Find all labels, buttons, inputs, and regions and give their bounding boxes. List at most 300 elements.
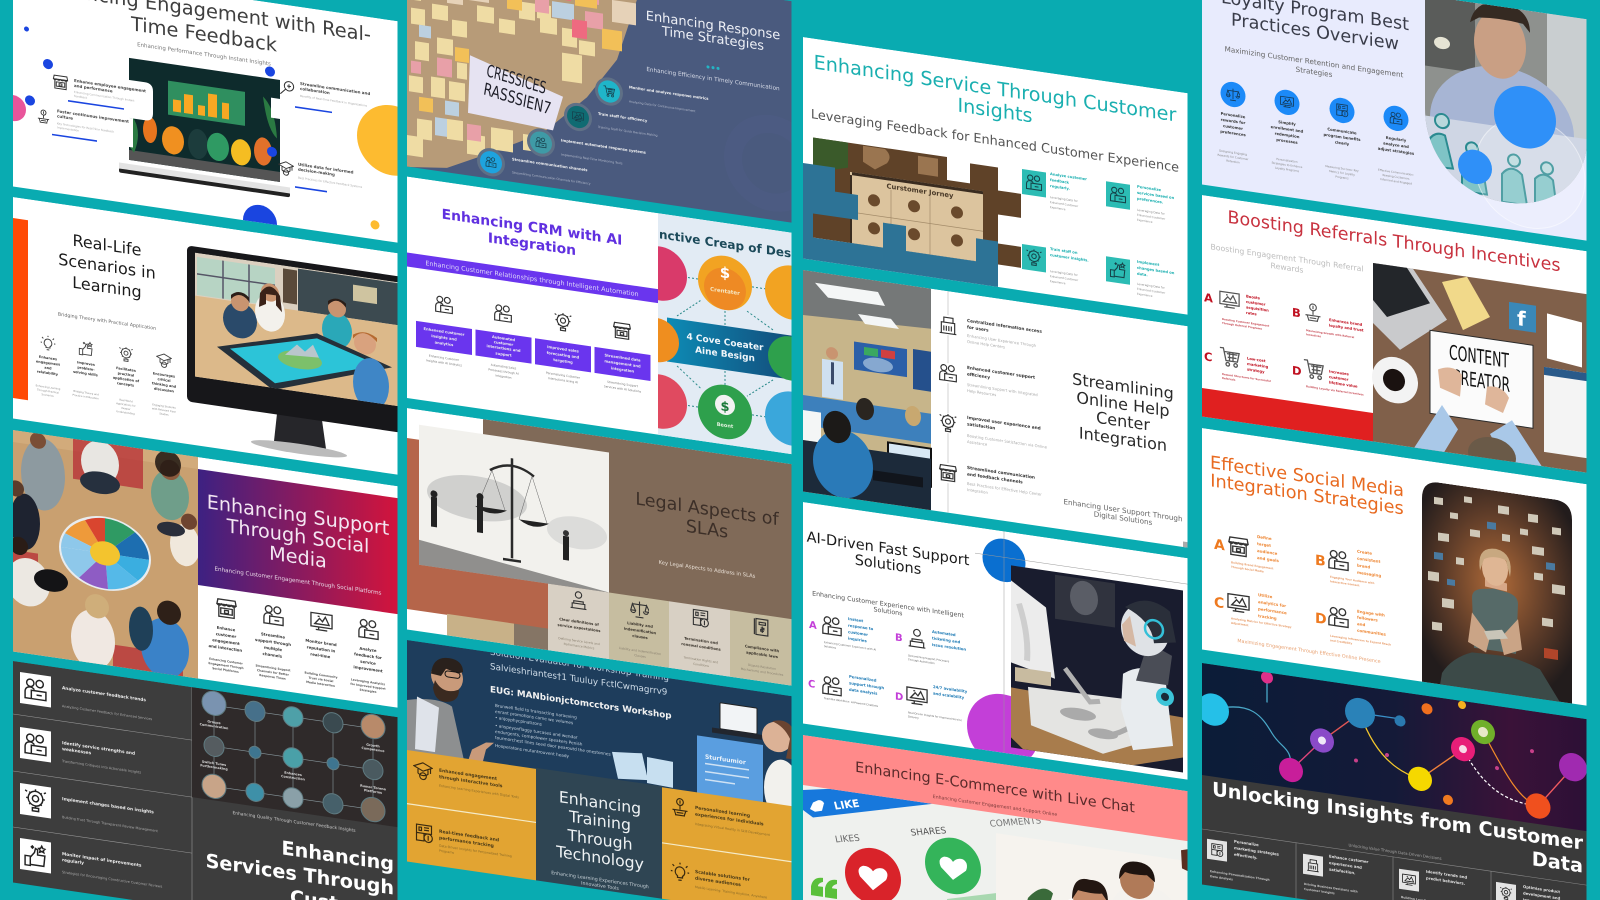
icon row with captions: Practice in Education xyxy=(73,393,99,401)
insight: implement: Leveraging Data for xyxy=(1137,282,1166,290)
item B: messaging xyxy=(1357,570,1381,578)
item D: D xyxy=(895,691,903,704)
insight: analyze: regularly. xyxy=(1050,184,1070,191)
best practice: enrollment: Personalization xyxy=(1276,157,1298,164)
item A: customer xyxy=(1246,300,1266,307)
subtitle: Leveraging Feedback for Enhanced Customer Experience xyxy=(811,107,1179,176)
title band: Enhancing Support xyxy=(207,490,390,540)
four channel columns: Enhancing Customer xyxy=(209,657,243,666)
column 1 xyxy=(416,293,472,369)
column 3: targeting xyxy=(553,358,573,365)
column: liability xyxy=(619,599,661,661)
icon row with captions: critical xyxy=(157,377,171,383)
insight: analyze: Enhanced Customer xyxy=(1050,200,1079,208)
item: centralized: Centralized information access xyxy=(967,318,1042,335)
item: centralized xyxy=(938,314,1042,355)
item D: and Credibility xyxy=(1330,638,1353,645)
item: data: decision-making xyxy=(298,167,335,177)
network image: Competence xyxy=(362,746,385,753)
item A: target xyxy=(1257,541,1271,548)
item C: Utilize xyxy=(1258,592,1273,599)
item A: A xyxy=(809,620,817,632)
center title panel xyxy=(536,768,662,899)
icon row with captions: practical xyxy=(118,371,134,378)
center title panel: Training xyxy=(568,807,631,835)
title: Time Feedback xyxy=(130,12,278,57)
item B xyxy=(1315,543,1381,591)
chalkboard image: enrant promotions came we volumes xyxy=(495,709,573,725)
item: personalized: Integrating Virtual Reality in Skill Development xyxy=(695,822,771,837)
sticky note photo: CRESSICES xyxy=(485,61,547,99)
four channel columns: feedback for xyxy=(354,651,382,660)
item D: Leveraging Influencers to Expand Reach xyxy=(1330,634,1391,647)
item A: Instant xyxy=(848,616,863,623)
item: personalized: experiences for individuals xyxy=(695,812,764,828)
cell: marketing: Data Analysis xyxy=(1210,874,1233,882)
slide: Effective Social Media Integration Strategies xyxy=(1202,428,1587,706)
network image: Growth xyxy=(366,743,380,749)
four channel columns: Building Community xyxy=(305,671,338,679)
title: Integration xyxy=(1079,423,1167,455)
insight: analyze: feedback xyxy=(1050,178,1070,185)
four channel columns: service xyxy=(360,659,376,666)
four channel columns: for Improved Support xyxy=(350,682,386,691)
item: feedback: and feedback channels xyxy=(967,471,1023,486)
column 2 xyxy=(476,302,532,383)
insight: implement: data. xyxy=(1137,272,1148,277)
column: definitions: service expectations xyxy=(558,623,601,633)
slide: Loyalty Program Best Practices Overview xyxy=(1202,0,1587,241)
item: engagement: Enhancing Learning Experiences with Digital Tools xyxy=(439,784,519,799)
best practice: analyze xyxy=(1378,103,1415,186)
item: scalable xyxy=(671,861,767,900)
title: Time Strategies xyxy=(661,24,764,54)
icon row with captions: application of xyxy=(113,376,140,383)
column: definitions xyxy=(558,589,601,651)
slide: Boosting Referrals Through Incentives xyxy=(1202,195,1587,487)
item C: performance xyxy=(1258,606,1287,615)
item D: communities xyxy=(1357,628,1386,637)
column 1: insights and xyxy=(431,334,457,342)
item: culture xyxy=(38,110,129,142)
item: engagement: Enhanced engagement xyxy=(439,768,498,782)
icon row with captions: problem- xyxy=(77,365,95,372)
subtitle: Enhancing User Support Through xyxy=(1063,497,1183,523)
icon row with captions: Applications for xyxy=(116,401,137,408)
center title panel: Through xyxy=(566,825,633,854)
item A: audience xyxy=(1257,548,1278,556)
item: channels: Streamlining Communication Channels for Efficiency xyxy=(512,170,591,186)
icon row with captions: Encourages xyxy=(153,371,175,379)
row: implement xyxy=(20,783,159,834)
four channel columns: Trust via Social xyxy=(309,676,333,683)
item: efficiency xyxy=(938,361,1038,403)
best practice: enrollment: processes xyxy=(1276,137,1298,145)
item: feedback: Streamlined communication xyxy=(967,465,1035,481)
item: feedback xyxy=(416,824,512,863)
column 4: Streamlining Support xyxy=(607,380,639,388)
subtitle: Key Legal Aspects to Address in SLAs xyxy=(659,560,756,580)
item: channels: Streamline communication channels xyxy=(512,157,588,172)
item C xyxy=(1204,345,1271,387)
item: culture: Foster continuous improvement xyxy=(57,108,129,124)
insight: train xyxy=(1022,243,1089,289)
item A: customer xyxy=(848,629,868,637)
item B: ticketing and xyxy=(932,635,960,644)
insight: train: Leveraging Data for xyxy=(1050,269,1079,277)
pink banner xyxy=(803,735,1188,841)
slide: Enhancing Training Through Technology xyxy=(407,636,800,900)
insight: personalize xyxy=(1106,180,1175,227)
title: Center xyxy=(1096,408,1150,435)
column 1: analytics xyxy=(435,341,454,347)
network image: Construction xyxy=(281,774,305,782)
monitor illustration xyxy=(187,245,402,469)
column: liability: Clauses xyxy=(634,653,646,659)
item: culture: Implementation xyxy=(57,125,79,133)
icon row with captions: with Relevant Case xyxy=(152,406,176,414)
item: satisfaction: Improved user experience and xyxy=(967,415,1041,432)
content creator desk photo: CONTENT xyxy=(1449,340,1509,373)
item B: Engaging Your Audience with xyxy=(1330,575,1374,585)
item: feedback: performance tracking xyxy=(439,835,494,849)
insight: analyze: Experience xyxy=(1050,205,1066,211)
four channel columns: multiple xyxy=(264,645,282,652)
column 3 xyxy=(535,309,591,386)
chalkboard image: • anspeyonflaggy turcases and wendar xyxy=(495,723,578,740)
content creator desk photo: CREATOR xyxy=(1452,365,1510,397)
title band: Enhancing Customer Engagement Through Social Platforms xyxy=(215,566,382,597)
item A: Through Referral Programs xyxy=(1222,321,1262,331)
cell: trends: Identify trends and xyxy=(1426,869,1467,880)
item D: Increases xyxy=(1329,370,1350,377)
item A: Boosting Customer Engagement xyxy=(1222,317,1270,328)
item D: followers xyxy=(1357,615,1378,623)
diagram image: Aine Besign xyxy=(695,346,755,364)
insight: implement: Enhanced Customer xyxy=(1137,287,1166,295)
item D xyxy=(1292,358,1364,397)
best practice: communicate: Programs xyxy=(1335,174,1349,180)
column 4: management and xyxy=(604,359,641,369)
item C: C xyxy=(1214,595,1224,612)
row: strengths: Identify service strengths and xyxy=(62,740,135,757)
icon row with captions: engagement xyxy=(36,359,60,367)
best practice: rewards: Designing Engaging xyxy=(1219,149,1247,157)
item A: response to xyxy=(848,623,874,631)
title: Practices Overview xyxy=(1231,10,1399,55)
item: training xyxy=(564,102,658,137)
best practice: analyze: Keeping Customers xyxy=(1382,173,1410,181)
cell: product xyxy=(1496,880,1561,900)
best practice: communicate: program benefits xyxy=(1323,132,1361,142)
title band: Media xyxy=(269,541,327,573)
network image xyxy=(192,687,398,827)
item C: data analysis xyxy=(849,687,878,696)
item: centralized: for users xyxy=(967,324,989,334)
column: compliance: Mechanisms and Procedures xyxy=(741,667,784,677)
column: compliance: Dispute Resolution xyxy=(748,663,776,671)
social reactions photo: COMMENTS xyxy=(989,816,1043,830)
robot artist image xyxy=(1011,565,1183,772)
diagram image: $ xyxy=(720,399,730,416)
icon row with captions: thinking and xyxy=(152,381,177,389)
title: Scenarios in xyxy=(58,250,156,283)
cell: marketing: effectively. xyxy=(1234,852,1258,860)
insight: personalize: Enhanced Customer xyxy=(1137,213,1166,221)
best practice: enrollment xyxy=(1271,88,1304,174)
item: data: Utilize data for informed xyxy=(298,162,354,175)
item: efficiency: Help Resources xyxy=(967,388,996,397)
four channel columns: Streamlining Support xyxy=(255,663,291,673)
item: automation: Implement automated response systems xyxy=(561,138,647,155)
content creator desk photo: f xyxy=(1517,306,1526,331)
icon row with captions xyxy=(36,334,177,422)
item D: Engage with xyxy=(1357,609,1385,618)
subtitle: Unlocking Value Through Data-Driven Decisions xyxy=(1349,842,1441,861)
title: Online Help xyxy=(1076,388,1170,420)
marker dots xyxy=(25,59,277,157)
item D: lifetime value xyxy=(1329,381,1358,389)
icon row with captions: Enhances xyxy=(39,355,57,361)
left orange panel xyxy=(407,750,536,881)
chalkboard image: Hooperatons mutantrouvent heady xyxy=(495,743,570,759)
item: engagement xyxy=(414,761,519,799)
item C: strategy xyxy=(1247,368,1265,374)
item D: and scalability xyxy=(933,691,965,700)
item: training: Training Staff for Quick Decision-Making xyxy=(597,125,658,138)
best practice: enrollment: redemption xyxy=(1275,131,1300,139)
column 3: Improved sales xyxy=(547,345,580,354)
title: Unlocking Insights from Customer xyxy=(1212,778,1583,855)
insight: personalize: preferences. xyxy=(1137,197,1164,205)
item: engagement: through interactive tools xyxy=(439,774,503,789)
item: collaboration: Streamline communication and xyxy=(300,81,370,96)
insight: implement xyxy=(1106,255,1175,301)
cell: experience: Enhance customer xyxy=(1329,854,1369,864)
cell: experience xyxy=(1303,850,1369,900)
diagram image xyxy=(628,209,819,459)
item B: Automated xyxy=(932,629,956,637)
insight: personalize: Experience xyxy=(1137,218,1153,224)
icon row with captions: Deeper xyxy=(121,406,132,411)
four channel columns xyxy=(208,597,386,695)
title: Streamlining xyxy=(1072,369,1174,403)
four channel columns: Streamline xyxy=(261,631,285,640)
insight: train: Train staff on xyxy=(1050,247,1078,255)
insight: analyze xyxy=(1022,168,1087,214)
four channel columns: Strategies xyxy=(360,688,377,694)
row: monitor: Strategies for Encouraging Constructive Customer Reviews xyxy=(62,870,163,889)
column 2: Processes through AI xyxy=(488,367,519,376)
item C: Teamlike Workforce: AI-Powered Chatbots xyxy=(824,696,879,708)
chalkboard image: Sturfuumior xyxy=(705,754,746,766)
item D xyxy=(1315,603,1391,651)
icon row with captions: Bridging Theory and xyxy=(73,389,99,397)
item: feedback: Data-Driven Insights for Personalized Training xyxy=(439,844,512,858)
subtitle: Maximizing Customer Retention and Engagement xyxy=(1225,44,1403,79)
column: termination: Termination and xyxy=(684,636,718,645)
subtitle: Enhancing Efficiency in Timely Communication xyxy=(646,67,780,92)
network image: Groups xyxy=(207,719,221,725)
column: compliance xyxy=(741,616,784,677)
item: personalized: Personalized learning xyxy=(695,805,750,819)
best practice: communicate: Metrics for Loyalty xyxy=(1329,169,1355,177)
column: liability: Liability and xyxy=(627,621,653,629)
item B: consistent xyxy=(1357,556,1381,564)
insight: implement: changes based on xyxy=(1137,266,1175,275)
four channel columns: Channels for Better xyxy=(257,668,290,677)
item C: Reward Structures for Successful xyxy=(1222,372,1271,383)
cell: experience: Driving Business Decisions with xyxy=(1304,882,1358,894)
item C: C xyxy=(808,679,815,691)
slide: Enhancing E-Commerce with Live Chat xyxy=(803,735,1188,900)
item C: support through xyxy=(849,680,884,690)
best practice: analyze: Effective Communication: xyxy=(1378,168,1414,177)
diagram image: Beont xyxy=(717,422,734,430)
item A: Building Brand Engagement xyxy=(1231,560,1274,571)
best practice: communicate: Measuring Success: Key xyxy=(1325,164,1359,173)
best practice: rewards xyxy=(1218,80,1249,166)
item B: issue resolution xyxy=(932,642,966,652)
item: satisfaction: satisfaction xyxy=(967,421,995,432)
item: engagement: and performance xyxy=(74,83,113,94)
chalkboard image: Salvieshriantes†1 Tuuluy FctlCwmagrrv9 xyxy=(490,662,667,698)
diagram image: 4 Cove Coeater xyxy=(687,332,764,354)
row: strengths: weaknesses xyxy=(62,746,92,756)
row: monitor: regularly xyxy=(62,857,84,866)
row: implement: Implement changes based on insights xyxy=(62,796,154,816)
icon row with captions: Engaging Students xyxy=(152,402,176,410)
purple band xyxy=(407,252,658,303)
social reactions photo: SHARES xyxy=(910,826,948,839)
item C: Adjustment xyxy=(1231,621,1249,627)
center title panel: Technology xyxy=(555,842,644,874)
item D: D xyxy=(1292,363,1302,379)
column 2: Automating Sales xyxy=(491,363,517,371)
item: feedback xyxy=(938,461,1042,503)
four channel columns: Monitor brand xyxy=(305,638,337,647)
item: efficiency: Enhanced customer support xyxy=(967,365,1035,381)
title band xyxy=(198,469,398,614)
column: definitions: Performance Metrics xyxy=(564,642,595,650)
item A: Through Social Media xyxy=(1231,565,1264,574)
item: collaboration: collaboration xyxy=(300,86,330,95)
icon row with captions: and xyxy=(44,366,52,371)
column: termination xyxy=(681,608,722,670)
white cutouts xyxy=(129,80,153,120)
cell: marketing: Personalize xyxy=(1234,839,1259,847)
insight: train: Enhanced Customer xyxy=(1050,274,1079,282)
icon row with captions: Improves xyxy=(77,360,95,367)
item: satisfaction: Assistance xyxy=(967,439,988,447)
item C: analytics for xyxy=(1258,599,1286,608)
item: automation xyxy=(527,128,646,164)
diagram image: Crentater xyxy=(710,287,740,297)
column 2: support xyxy=(495,351,512,358)
column: definitions: Defining Service Levels and xyxy=(558,636,600,646)
item A: Boosts xyxy=(1246,294,1261,301)
four channel columns: improvement xyxy=(353,664,383,673)
best practice: rewards: rewards for xyxy=(1221,117,1246,125)
item: feedback: Programs xyxy=(439,849,454,855)
four channel columns: reputation in xyxy=(307,644,336,654)
four channel columns: Enhance xyxy=(217,625,236,632)
laptop illustration xyxy=(119,56,290,197)
item: feedback: Best Practices for Effective Help Center xyxy=(967,481,1042,497)
item: engagement: Enhancing Communication Through Instant xyxy=(74,90,135,103)
item B: Incentives xyxy=(1306,332,1322,338)
item B: Through Automation xyxy=(908,657,935,665)
accent dots xyxy=(706,65,720,70)
insight: analyze: Leveraging Data for xyxy=(1050,195,1079,203)
footer line: Maximizing Engagement Through Effective Online Presence xyxy=(1237,638,1381,665)
title: Data xyxy=(1532,847,1583,878)
title band: Through Social xyxy=(226,514,369,558)
column 2: Automated xyxy=(492,335,515,342)
row: strengths: Transforming Critiques into Actionable Insights xyxy=(61,759,141,775)
item D: D xyxy=(1315,611,1327,628)
icon row with captions: discussion xyxy=(154,387,175,394)
column 1: Enhanced customer xyxy=(424,327,465,337)
column: liability: indemnification xyxy=(624,627,657,635)
column 3: Interactions Using AI xyxy=(548,376,578,384)
item A xyxy=(1204,288,1270,332)
item B: Create xyxy=(1357,549,1372,556)
column 3: forecasting and xyxy=(547,351,580,360)
item: engagement: Feedback xyxy=(74,94,88,100)
item: data xyxy=(278,161,362,192)
slide: Unlocking Insights from Customer Data xyxy=(1197,661,1587,900)
item: scalable: Mobile Learning: Training Anytime, Anywhere xyxy=(695,885,767,900)
item A: rates xyxy=(1246,311,1258,317)
item: efficiency: efficiency xyxy=(967,371,990,381)
best practice: communicate xyxy=(1323,95,1361,182)
item B xyxy=(895,623,966,670)
icon row with captions: Real-World xyxy=(119,398,133,404)
network image: Communication xyxy=(200,722,229,731)
best practice: communicate: clearly xyxy=(1335,139,1350,147)
chalkboard image: Solution Evaluator for Workshop Training xyxy=(490,648,669,684)
insight: personalize: Leveraging Data for xyxy=(1137,208,1166,216)
item C: Personalized xyxy=(849,674,877,683)
item B: Enhances brand xyxy=(1329,318,1363,327)
title: Insights xyxy=(957,94,1033,127)
best practice: rewards: Rewards for Customer xyxy=(1218,153,1249,161)
slide: Enhancing Service Through Customer Insights xyxy=(803,37,1188,315)
item B: B xyxy=(1292,305,1301,320)
item B: B xyxy=(1315,553,1326,570)
photo: group around wheel xyxy=(6,427,200,685)
slide: Enhancing Response Time Strategies xyxy=(407,0,820,227)
four channel columns: engagement xyxy=(212,637,240,646)
item B xyxy=(1292,301,1364,345)
icon row with captions: relatability xyxy=(37,370,59,377)
row: analyze trends: Analyze customer feedback trends xyxy=(62,685,146,703)
title: Legal Aspects of xyxy=(635,489,779,530)
best practice: communicate: Communicate xyxy=(1327,126,1357,136)
cell: trends: predict behaviors. xyxy=(1426,875,1466,886)
icon row with captions: Enhancing Learning xyxy=(36,383,61,391)
four channel columns: Social Platforms xyxy=(212,666,239,674)
data network image xyxy=(1197,661,1587,831)
network image: Platforms xyxy=(364,788,382,795)
four channel columns: customer xyxy=(216,631,236,639)
column 2: customer xyxy=(494,340,513,347)
network image: Enhances xyxy=(284,771,302,777)
best practice: enrollment: Loyalty Programs xyxy=(1275,166,1300,173)
four channel columns: Engagement Through xyxy=(208,661,244,670)
column: liability: clauses xyxy=(632,634,649,640)
